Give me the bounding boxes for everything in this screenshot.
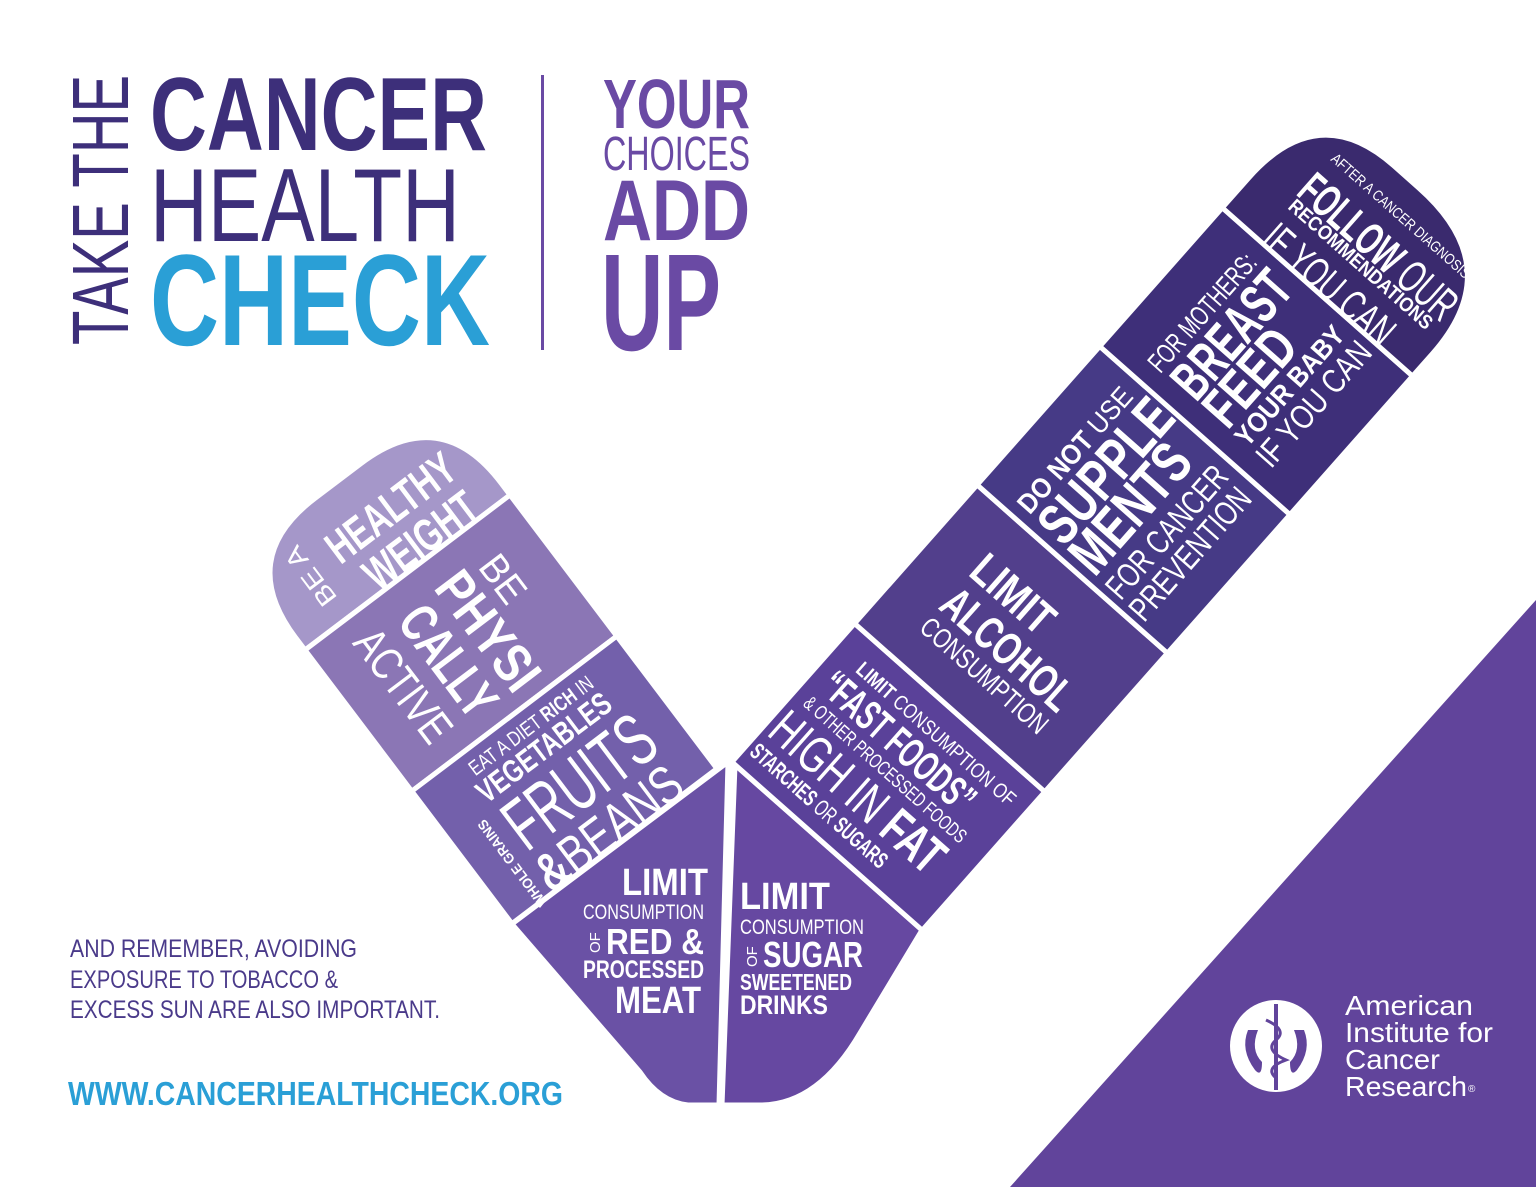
segment: sugar drinks <box>722 765 922 1105</box>
logo text: Research <box>1345 1071 1467 1102</box>
text: supplements: MENTS <box>1056 430 1205 587</box>
text block: reminder: EXCESS SUN ARE ALSO IMPORTANT. <box>70 996 440 1024</box>
text: follow recommendations: IF YOU CAN <box>1254 214 1405 355</box>
text: physically active: ACTIVE <box>344 618 464 753</box>
text: physically active: PHYSI <box>423 559 553 703</box>
text block: reminder: EXPOSURE TO TOBACCO & <box>70 966 338 994</box>
text: follow recommendations: RECOMMENDATIONS <box>1284 195 1437 334</box>
text: sugar drinks: SWEETENED <box>740 969 852 995</box>
text: vegetables fruits beans: EAT A DIET RICH IN <box>465 672 598 780</box>
logo text <box>1345 990 1493 1102</box>
logo: AICR emblem <box>1230 1000 1322 1092</box>
text: alcohol <box>914 543 1115 740</box>
text: sugar drinks: CONSUMPTION <box>740 916 864 939</box>
subtitle: your choices add up: UP <box>601 226 721 380</box>
segment: vegetables fruits beans <box>412 636 717 924</box>
text: vegetables fruits beans: &BEANS <box>523 754 695 904</box>
text: breastfeed: IF YOU CAN <box>1249 333 1380 475</box>
text: fast foods: HIGH IN FAT <box>758 700 957 886</box>
segment: supplements <box>977 346 1290 653</box>
subtitle: your choices add up: YOUR <box>603 65 750 143</box>
text: supplements: FOR CANCER <box>1098 458 1236 607</box>
segment: physically active <box>305 495 617 791</box>
title: take the cancer health check: CHECK <box>150 227 490 373</box>
text block: reminder: AND REMEMBER, AVOIDING <box>70 935 357 963</box>
text: red meat: PROCESSED <box>583 956 704 984</box>
logo text: ® <box>1468 1084 1476 1095</box>
segment: red meat <box>512 762 728 1105</box>
text: red meat: CONSUMPTION <box>583 901 704 924</box>
text: physically active <box>344 534 580 761</box>
text: fast foods <box>745 641 1020 910</box>
text: red meat: OF <box>587 932 604 953</box>
segment: follow recommendations <box>1222 99 1509 376</box>
title: take the cancer health check: HEALTH <box>150 148 460 264</box>
text: vegetables fruits beans: FRUITS <box>486 697 672 866</box>
segment: breastfeed <box>1100 208 1413 515</box>
text: sugar drinks: DRINKS <box>740 990 828 1020</box>
background corner triangle <box>1010 600 1536 1187</box>
logo text: Cancer <box>1345 1044 1440 1075</box>
text: sugar drinks: SUGAR <box>763 934 863 975</box>
text: alcohol: LIMIT <box>960 543 1066 645</box>
text: breastfeed: FOR MOTHERS: <box>1142 247 1263 378</box>
segment: alcohol <box>855 485 1167 792</box>
segment: healthy weight <box>236 403 510 650</box>
text: follow recommendations: AFTER A CANCER DIAGNOSIS <box>1327 150 1473 282</box>
text: sugar drinks: LIMIT <box>740 876 830 918</box>
text: sugar drinks <box>740 876 864 1020</box>
text: vegetables fruits beans <box>440 663 699 916</box>
text: breastfeed <box>1142 240 1380 476</box>
subtitle: your choices add up: CHOICES <box>603 128 750 181</box>
text: supplements <box>1008 372 1266 629</box>
checkmark: left arm <box>236 403 717 924</box>
text: healthy weight: HEALTHY <box>315 441 466 573</box>
logo text: American <box>1345 990 1473 1021</box>
checkmark: right arm <box>732 99 1509 930</box>
text: red meat: MEAT <box>615 980 701 1022</box>
text: healthy weight: WEIGHT <box>353 480 488 600</box>
title: take the cancer health check <box>56 57 490 373</box>
url: WWW.CANCERHEALTHCHECK.ORG <box>68 1075 563 1112</box>
text: red meat: RED & <box>606 921 704 962</box>
text: fast foods: LIMIT CONSUMPTION OF <box>851 658 1020 811</box>
text: breastfeed: BREAST <box>1158 257 1305 411</box>
segment: fast foods <box>732 623 1045 930</box>
text: alcohol: ALCOHOL <box>931 577 1085 722</box>
text: vegetables fruits beans: VEGETABLES <box>469 685 618 810</box>
text: vegetables fruits beans: WHOLE GRAINS <box>474 817 550 910</box>
text block: reminder <box>70 935 440 1024</box>
text: breastfeed: FEED <box>1189 315 1309 439</box>
text: healthy weight: BE A <box>277 539 343 612</box>
title: take the cancer health check: CANCER <box>150 57 487 173</box>
text: supplements: SUPPLE <box>1025 385 1187 557</box>
text: alcohol: CONSUMPTION <box>914 611 1054 740</box>
text: red meat <box>583 862 708 1022</box>
text: healthy weight <box>277 441 493 612</box>
text: supplements: DO NOT USE <box>1011 381 1139 519</box>
text: sugar drinks: OF <box>744 946 761 967</box>
text: follow recommendations <box>1254 150 1473 355</box>
text: physically active: BE <box>470 546 535 612</box>
text: fast foods: STARCHES OR SUGARS <box>745 738 893 873</box>
text: fast foods: & OTHER PROCESSED FOODS <box>799 692 971 848</box>
text: supplements: PREVENTION <box>1122 480 1259 629</box>
subtitle: your choices add up <box>601 65 750 380</box>
text: fast foods: “FAST FOODS” <box>812 661 986 823</box>
text: breastfeed: YOUR BABY <box>1228 319 1351 452</box>
logo text: Institute for <box>1345 1017 1493 1048</box>
text: physically active: CALLY <box>386 593 510 729</box>
subtitle: your choices add up: ADD <box>603 163 750 259</box>
text: follow recommendations: FOLLOW OUR <box>1288 163 1469 331</box>
text: red meat: LIMIT <box>622 862 708 904</box>
